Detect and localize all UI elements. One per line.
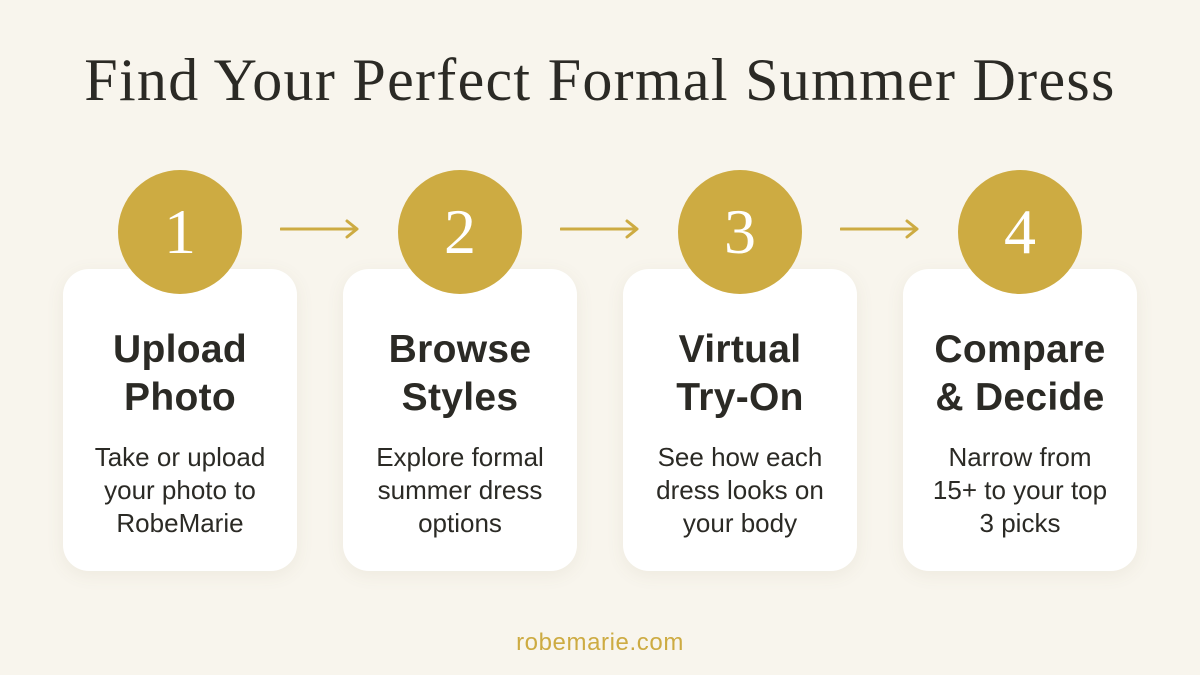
description 4: 3 picks — [980, 508, 1060, 538]
footer: robemarie.com — [516, 629, 684, 656]
description 1 — [95, 442, 265, 538]
description 1: RobeMarie — [116, 508, 244, 538]
heading 3 — [676, 328, 804, 419]
description 1: your photo to — [104, 475, 256, 505]
heading 1: Upload — [113, 328, 247, 371]
heading 4: Compare — [934, 328, 1106, 371]
heading 1 — [113, 328, 247, 419]
step 4 — [903, 170, 1137, 574]
description 2: summer dress — [378, 475, 542, 505]
circle 1 — [118, 170, 242, 294]
description 3: See how each — [658, 442, 822, 472]
description 4: Narrow from — [948, 442, 1092, 472]
circle 2 — [398, 170, 522, 294]
circle 4: 4 — [1004, 196, 1036, 267]
description 4: 15+ to your top — [933, 475, 1107, 505]
title: Find Your Perfect Formal Summer Dress — [84, 47, 1116, 113]
circle 4 — [958, 170, 1082, 294]
description 1: Take or upload — [95, 442, 265, 472]
heading 4: & Decide — [935, 376, 1105, 419]
description 4 — [933, 442, 1107, 538]
description 2: options — [418, 508, 502, 538]
circle 1: 1 — [164, 196, 196, 267]
circle 2: 2 — [444, 196, 476, 267]
heading 1: Photo — [124, 376, 236, 419]
step 3 — [623, 170, 857, 574]
circle 3 — [678, 170, 802, 294]
heading 4 — [934, 328, 1106, 419]
step 2 — [343, 170, 577, 574]
arrow 1 — [280, 219, 359, 239]
description 3: dress looks on — [656, 475, 824, 505]
heading 2: Browse — [389, 328, 531, 371]
arrow 3 — [840, 219, 919, 239]
circle 3: 3 — [724, 196, 756, 267]
description 2 — [376, 442, 544, 538]
heading 3: Try-On — [676, 376, 804, 419]
description 3 — [656, 442, 824, 538]
description 3: your body — [683, 508, 797, 538]
step 1 — [63, 170, 297, 574]
heading 2 — [389, 328, 531, 419]
heading 2: Styles — [402, 376, 518, 419]
arrow 2 — [560, 219, 639, 239]
heading 3: Virtual — [679, 328, 801, 371]
description 2: Explore formal — [376, 442, 544, 472]
